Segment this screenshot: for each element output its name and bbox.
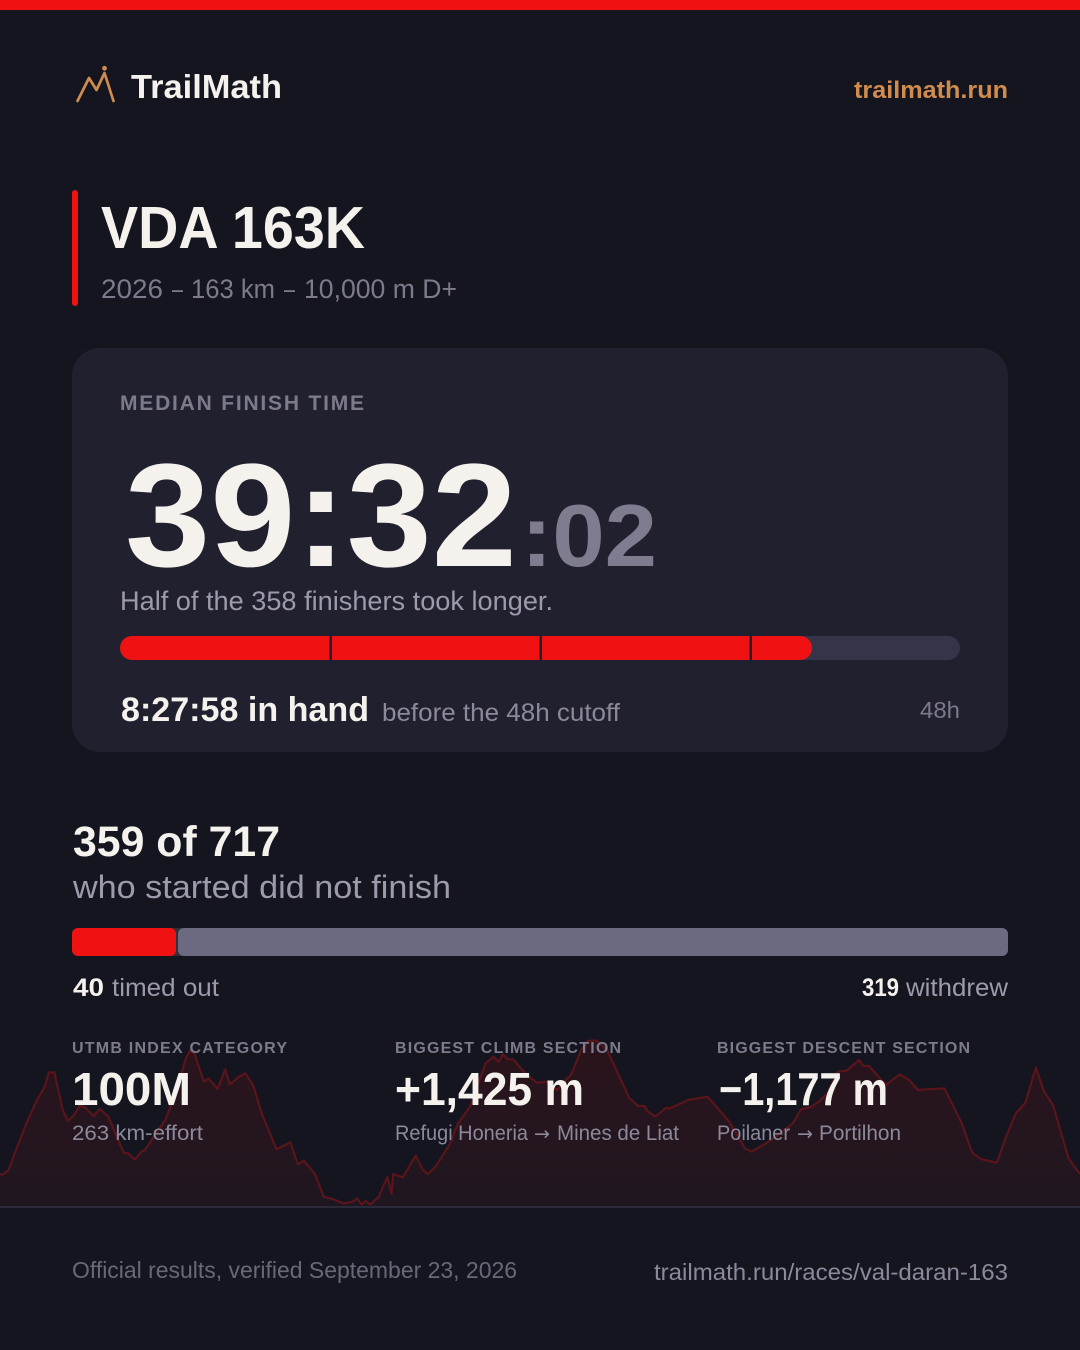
timed out count: 40 <box>73 974 104 1002</box>
verification note: Official results, verified September 23, 2026 <box>72 1257 517 1283</box>
race subtitle: – <box>284 274 295 304</box>
median time: 39:32 <box>125 434 517 598</box>
title accent rule <box>72 190 78 306</box>
withdrew count: 319 <box>862 974 899 1002</box>
stat: biggest climb section: +1,425 m <box>395 1063 584 1115</box>
stat: UTMB index category <box>72 1040 287 1145</box>
DNF split bar <box>72 928 1008 956</box>
explanatory text: Half of the 358 finishers took longer. <box>120 586 553 616</box>
race subtitle: 2026 <box>101 274 163 304</box>
elevation profile chart <box>0 1041 1080 1207</box>
panel label: MEDIAN FINISH TIME <box>120 392 364 415</box>
race title: VDA 163K <box>101 195 365 261</box>
stat: UTMB index category: UTMB INDEX CATEGORY <box>72 1040 287 1057</box>
stat: UTMB index category: 100M <box>72 1063 191 1115</box>
stat: biggest climb section <box>395 1040 679 1145</box>
race URL: trailmath.run/races/val-daran-163 <box>654 1259 1008 1285</box>
race subtitle: 163 km <box>191 274 275 304</box>
header: logo and site link <box>78 66 1008 105</box>
race subtitle: – <box>172 274 183 304</box>
stat: biggest climb section: Refugi Honeria <box>395 1122 528 1145</box>
footer <box>72 1257 1008 1285</box>
stat: biggest climb section: BIGGEST CLIMB SECTION <box>395 1040 621 1057</box>
stat: biggest descent section: −1,177 m <box>719 1063 888 1115</box>
race subtitle: 10,000 m D+ <box>304 274 457 304</box>
panel: median finish time <box>72 348 1008 752</box>
stat: biggest descent section <box>717 1040 970 1145</box>
brand name: TrailMath <box>131 68 282 105</box>
cutoff progress bar <box>120 636 960 660</box>
icon: mountain logo <box>78 66 114 101</box>
withdrew count <box>862 974 1009 1002</box>
stat: biggest climb section: Mines de Liat <box>557 1122 679 1145</box>
stat: biggest descent section: BIGGEST DESCENT SECTION <box>717 1040 970 1057</box>
stat: biggest descent section: → <box>797 1123 813 1145</box>
time in hand: 8:27:58 in hand <box>121 691 369 729</box>
stat: UTMB index category: 263 km-effort <box>72 1122 203 1145</box>
cutoff note: before the 48h cutoff <box>382 699 620 727</box>
DNF subhead: who started did not finish <box>72 869 451 905</box>
stat: biggest descent section: Portilhon <box>819 1122 901 1145</box>
DNF headline: 359 of 717 <box>73 818 280 866</box>
median time: :02 <box>521 486 657 585</box>
race subtitle <box>101 274 457 304</box>
site link: trailmath.run <box>854 77 1008 104</box>
stat: biggest climb section: → <box>534 1123 550 1145</box>
race title block <box>72 190 457 306</box>
top accent bar <box>0 0 1080 10</box>
panel: did not finish <box>72 818 1009 1002</box>
withdrew count: withdrew <box>905 974 1009 1002</box>
timed out count: timed out <box>112 974 219 1002</box>
bar end label: 48h <box>920 697 960 723</box>
stat: biggest descent section: Poilaner <box>717 1122 790 1145</box>
